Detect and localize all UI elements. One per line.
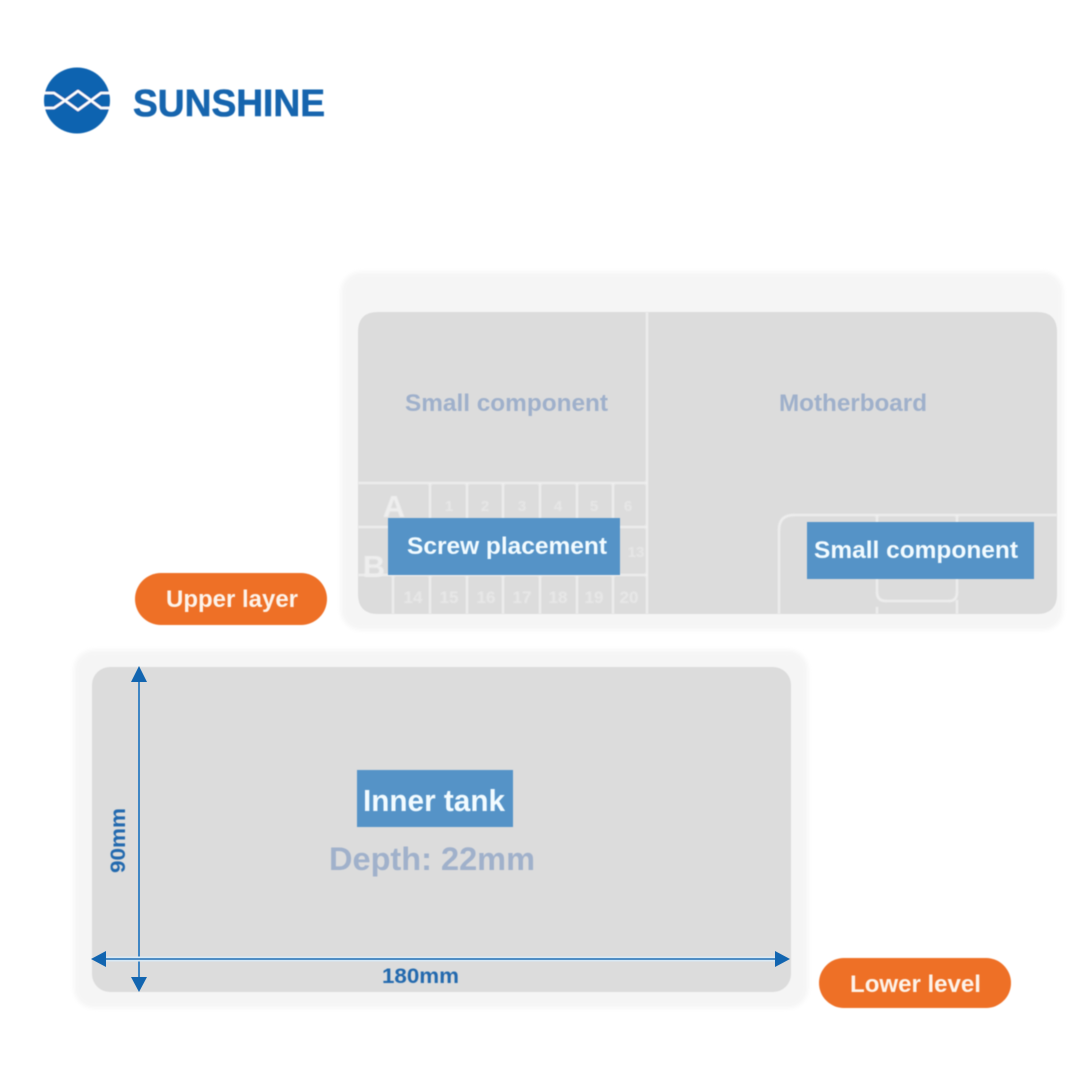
screw grid labels: 15: [440, 588, 458, 607]
screw grid labels: 1: [445, 498, 453, 515]
screw grid labels: 13: [628, 544, 644, 561]
label: motherboard: Motherboard: [779, 390, 927, 417]
tag: small component: Small component: [814, 537, 1018, 564]
screw grid labels: 19: [585, 588, 603, 607]
badge: lower level: [819, 958, 1011, 1008]
tray outer rim: [74, 650, 808, 1008]
label: depth: Depth: 22mm: [329, 841, 535, 877]
tag: small component: [807, 522, 1034, 579]
arrow: 180mm width: [91, 951, 790, 967]
tray inner surface: [358, 312, 1057, 614]
panel: upper layer tray: [341, 272, 1063, 630]
arrow: 90mm height: [131, 666, 147, 992]
tag: inner tank: Inner tank: [363, 783, 506, 818]
icon: logo circle: [44, 68, 110, 134]
dimension: 180mm: 180mm: [382, 965, 459, 988]
badge: upper layer: Upper layer: [166, 586, 298, 613]
screw grid labels: [363, 489, 644, 607]
dimension: 90mm: 90mm: [107, 808, 130, 873]
compartment dividers and screw grid: [358, 312, 1057, 614]
badge: upper layer: [135, 573, 327, 625]
screw grid labels: 17: [513, 588, 531, 607]
tag: inner tank: [357, 770, 513, 827]
screw grid labels: 18: [549, 588, 567, 607]
brand name: SUNSHINE: [133, 83, 325, 125]
screw grid labels: 5: [590, 498, 598, 515]
screw grid labels: 14: [404, 588, 423, 607]
screw grid labels: 3: [518, 498, 526, 515]
screw grid labels: 20: [620, 588, 638, 607]
badge: lower level: Lower level: [850, 971, 981, 998]
screw grid labels: B: [363, 549, 385, 584]
screw grid labels: 16: [477, 588, 495, 607]
tag: screw placement: [388, 518, 620, 575]
screw grid labels: 4: [554, 498, 563, 515]
label: small component: Small component: [405, 390, 608, 417]
tag: screw placement: Screw placement: [407, 533, 607, 560]
tray outer rim: [341, 272, 1063, 630]
screw grid labels: 2: [481, 498, 489, 515]
screw grid labels: A: [383, 489, 405, 524]
screw grid labels: 6: [624, 498, 632, 515]
logo: Sunshine: [44, 68, 325, 134]
tray inner surface: [92, 667, 791, 992]
panel: lower level tray: [74, 650, 808, 1008]
